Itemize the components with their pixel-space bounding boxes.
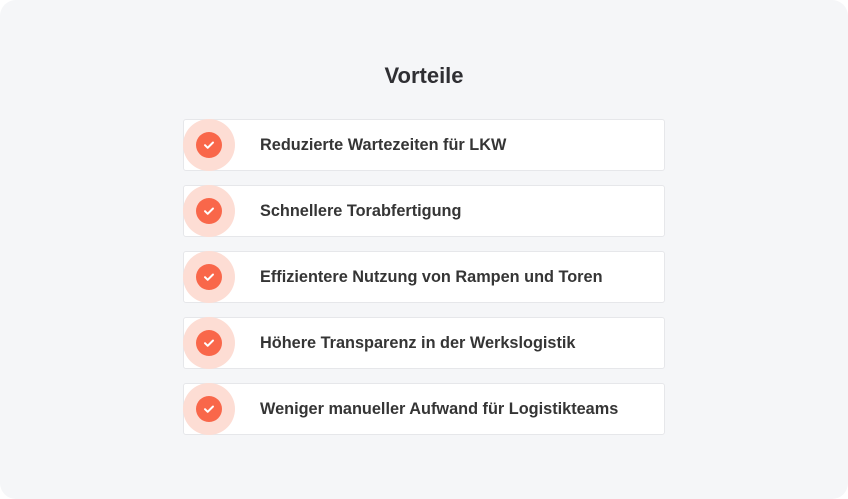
row 1: Reduzierte Wartezeiten für LKW <box>260 136 506 154</box>
row 5 <box>183 383 665 435</box>
icon: check <box>183 383 235 435</box>
row 3: Effizientere Nutzung von Rampen und Toren <box>260 268 603 286</box>
row 5: Weniger manueller Aufwand für Logistikteams <box>260 400 618 418</box>
icon: check <box>183 119 235 171</box>
row 1 <box>183 119 665 171</box>
icon: check <box>183 251 235 303</box>
row 4 <box>183 317 665 369</box>
row 4: Höhere Transparenz in der Werkslogistik <box>260 334 575 352</box>
title: Vorteile <box>384 63 464 88</box>
icon: check <box>183 317 235 369</box>
row 2: Schnellere Torabfertigung <box>260 202 461 220</box>
row 2 <box>183 185 665 237</box>
row 3 <box>183 251 665 303</box>
icon: check <box>183 185 235 237</box>
